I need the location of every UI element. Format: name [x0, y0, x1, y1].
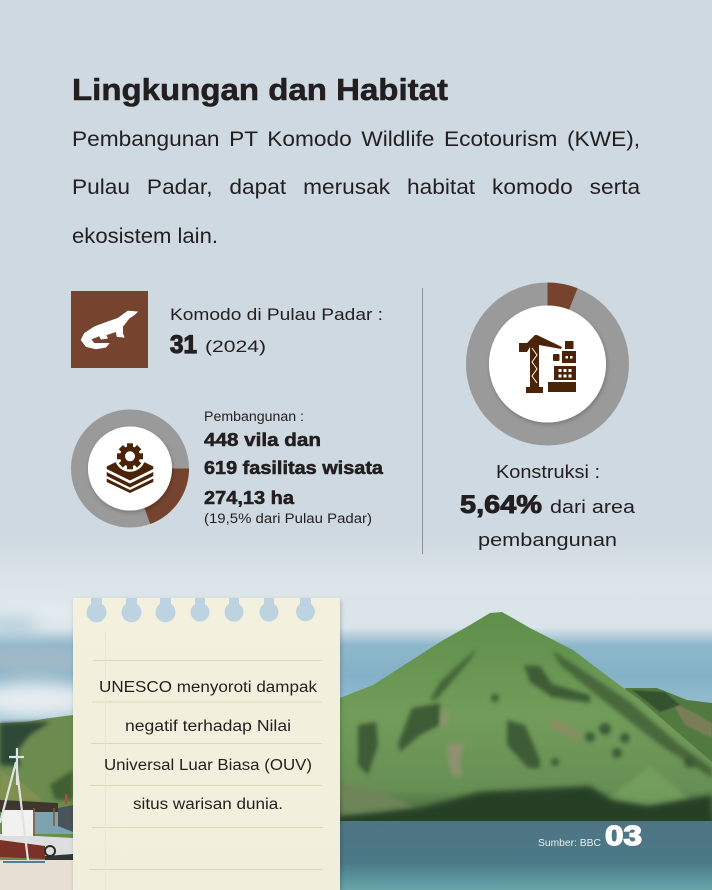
- intro paragraph: [72, 128, 640, 199]
- icon: crane and building: [519, 335, 576, 393]
- far right hill: [625, 688, 712, 770]
- note text: situs warisan dunia.: [133, 796, 283, 813]
- source credit: Sumber: BBC: [538, 837, 601, 849]
- intro paragraph: last line: ekosistem lain.: [72, 225, 218, 248]
- title: Lingkungan dan Habitat: [72, 73, 448, 107]
- text: Konstruksi stat: 5,64%: [460, 491, 542, 519]
- text: Konstruksi stat: Konstruksi :: [496, 462, 600, 482]
- text: Konstruksi stat: pembangunan: [478, 530, 617, 550]
- intro paragraph: Pulau Padar, dapat merusak habitat komodo serta: [72, 176, 640, 199]
- text: Pembangunan stats: (19,5% dari Pulau Padar): [204, 511, 372, 526]
- number: 31 (2024): [170, 331, 266, 359]
- text: Pembangunan stats: 619 fasilitas wisata: [204, 457, 384, 478]
- number: 31 (2024): (2024): [205, 337, 266, 356]
- label: Komodo di Pulau Padar: Komodo di Pulau Padar :: [170, 305, 383, 324]
- boat: [0, 748, 73, 890]
- page number: 03: [605, 820, 642, 851]
- divider: [422, 288, 423, 554]
- panel: notebook paper note: [73, 598, 340, 890]
- text: Pembangunan stats: Pembangunan :: [204, 409, 304, 424]
- panel: development donut: [80, 409, 384, 526]
- donut chart: 5.64%: [478, 282, 618, 434]
- panel: construction donut: [460, 282, 636, 550]
- text: Pembangunan stats: 274,13 ha: [204, 487, 295, 508]
- intro paragraph: Pembangunan PT Komodo Wildlife Ecotourism (KWE),: [72, 128, 640, 151]
- text: Pembangunan stats: 448 vila dan: [204, 429, 321, 450]
- donut chart: 19.5%: [80, 418, 189, 524]
- note text: Universal Luar Biasa (OUV): [104, 757, 312, 774]
- left hill: [0, 715, 73, 862]
- note text: UNESCO menyoroti dampak: [99, 679, 317, 696]
- main mountain: [340, 612, 712, 821]
- icon: gear on layers: [107, 441, 153, 493]
- note text: [99, 679, 317, 813]
- text: Konstruksi stat: dari area: [550, 497, 636, 517]
- background illustration: sky, mountain, sea and boat: [0, 567, 712, 890]
- text: Konstruksi stat: [460, 462, 636, 550]
- note text: negatif terhadap Nilai: [125, 718, 291, 735]
- panel: Komodo count: [71, 291, 383, 368]
- icon: komodo dragon: [71, 291, 148, 368]
- paper sheet with punched holes: [73, 598, 340, 890]
- text: Pembangunan stats: [204, 409, 384, 526]
- number: 31 (2024): 31: [170, 331, 197, 359]
